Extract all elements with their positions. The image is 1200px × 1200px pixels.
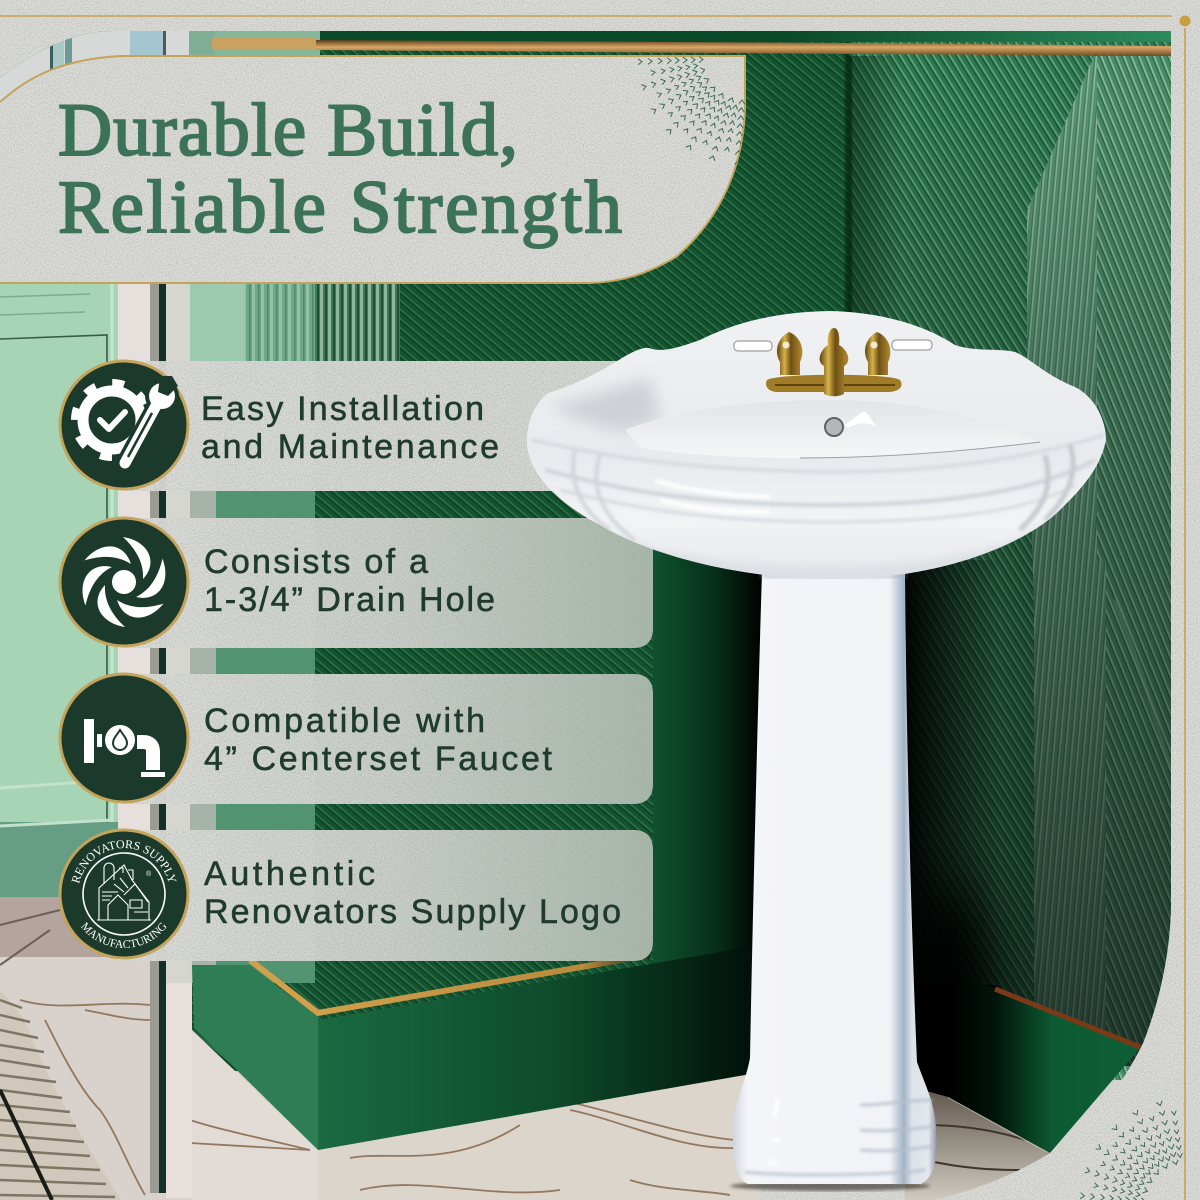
faucet base plate — [766, 375, 902, 392]
label text: Compatible with — [204, 702, 485, 740]
green skirting box — [192, 965, 318, 1150]
decorative leaf cluster — [638, 56, 745, 165]
glass shower frame — [118, 283, 150, 960]
label text: Consists of a — [204, 543, 428, 581]
label text: 4” Centerset Faucet — [204, 740, 553, 778]
pedestal sink — [527, 311, 1106, 1191]
icon: drain swirl — [60, 518, 188, 646]
basin — [527, 311, 1106, 579]
icon: pipe with water drop — [60, 674, 188, 802]
shade at wall corner — [849, 56, 898, 319]
left knob — [777, 332, 802, 375]
icon: Renovators Supply logo — [58, 828, 190, 960]
lower basin shade — [637, 525, 1042, 578]
label text — [204, 543, 495, 619]
rug — [0, 990, 121, 1200]
white handles — [734, 341, 772, 351]
right ribbed panel — [1097, 56, 1175, 1080]
pedestal shadow — [730, 1181, 930, 1191]
marble veins — [20, 1000, 735, 1195]
gold handle bar — [212, 37, 316, 50]
label text: Easy Installation — [201, 390, 484, 428]
icon: gear and wrench — [60, 361, 188, 489]
rim ribs — [532, 435, 1104, 540]
label text — [204, 702, 553, 778]
faucet — [734, 328, 932, 396]
window at top left — [0, 31, 189, 101]
floor — [0, 957, 192, 1200]
spout — [820, 328, 848, 396]
icon: Renovators Supply logo: RENOVATORS SUPPLY — [72, 840, 176, 884]
overflow drain hole — [825, 418, 843, 436]
vein highlight on right panel — [1115, 600, 1171, 770]
shadow right of pedestal — [905, 560, 992, 985]
label text — [204, 855, 621, 931]
label text: and Maintenance — [201, 428, 499, 466]
title: Durable Build, — [58, 89, 518, 172]
smooth dark wall left of pedestal — [653, 550, 762, 964]
pedestal base steps — [745, 1100, 935, 1175]
icon: Renovators Supply logo: ® — [146, 870, 152, 878]
black corner behind pedestal — [920, 985, 997, 1097]
basin bowl — [625, 400, 1040, 458]
mint door — [0, 284, 118, 822]
label text: 1-3/4” Drain Hole — [204, 581, 495, 619]
title: Reliable Strength — [58, 166, 622, 249]
leaf panel on wall — [1027, 56, 1106, 1080]
glass wall strips — [216, 491, 315, 983]
pedestal column — [733, 572, 937, 1184]
icon: Renovators Supply logo: MANUFACTURING — [80, 922, 166, 948]
back wall left — [0, 31, 850, 1071]
top green band — [320, 31, 1171, 42]
label text: Renovators Supply Logo — [204, 893, 621, 931]
floor right of pedestal — [905, 1085, 1050, 1200]
copper trim right — [995, 989, 1140, 1047]
panel: Easy Installation — [124, 361, 653, 491]
label text — [201, 390, 499, 466]
panel: Logo — [124, 830, 653, 961]
base highlights — [768, 1098, 780, 1163]
title banner — [0, 56, 745, 283]
green skirting right — [948, 975, 1140, 1153]
wall darkening towards floor — [849, 56, 1179, 1066]
title — [58, 89, 622, 249]
back wall right — [849, 31, 1179, 1071]
shaded left rim — [550, 378, 660, 432]
top section of glass wall strips — [190, 283, 245, 361]
label text: Authentic — [204, 855, 375, 893]
panel: Centerset Faucet — [124, 674, 653, 804]
panel: Drain Hole — [124, 518, 653, 648]
decorative leaf cluster bottom right — [1080, 1101, 1183, 1200]
top gold moulding — [316, 40, 1171, 56]
right knob — [865, 332, 890, 375]
gold floor trim — [250, 955, 650, 1013]
